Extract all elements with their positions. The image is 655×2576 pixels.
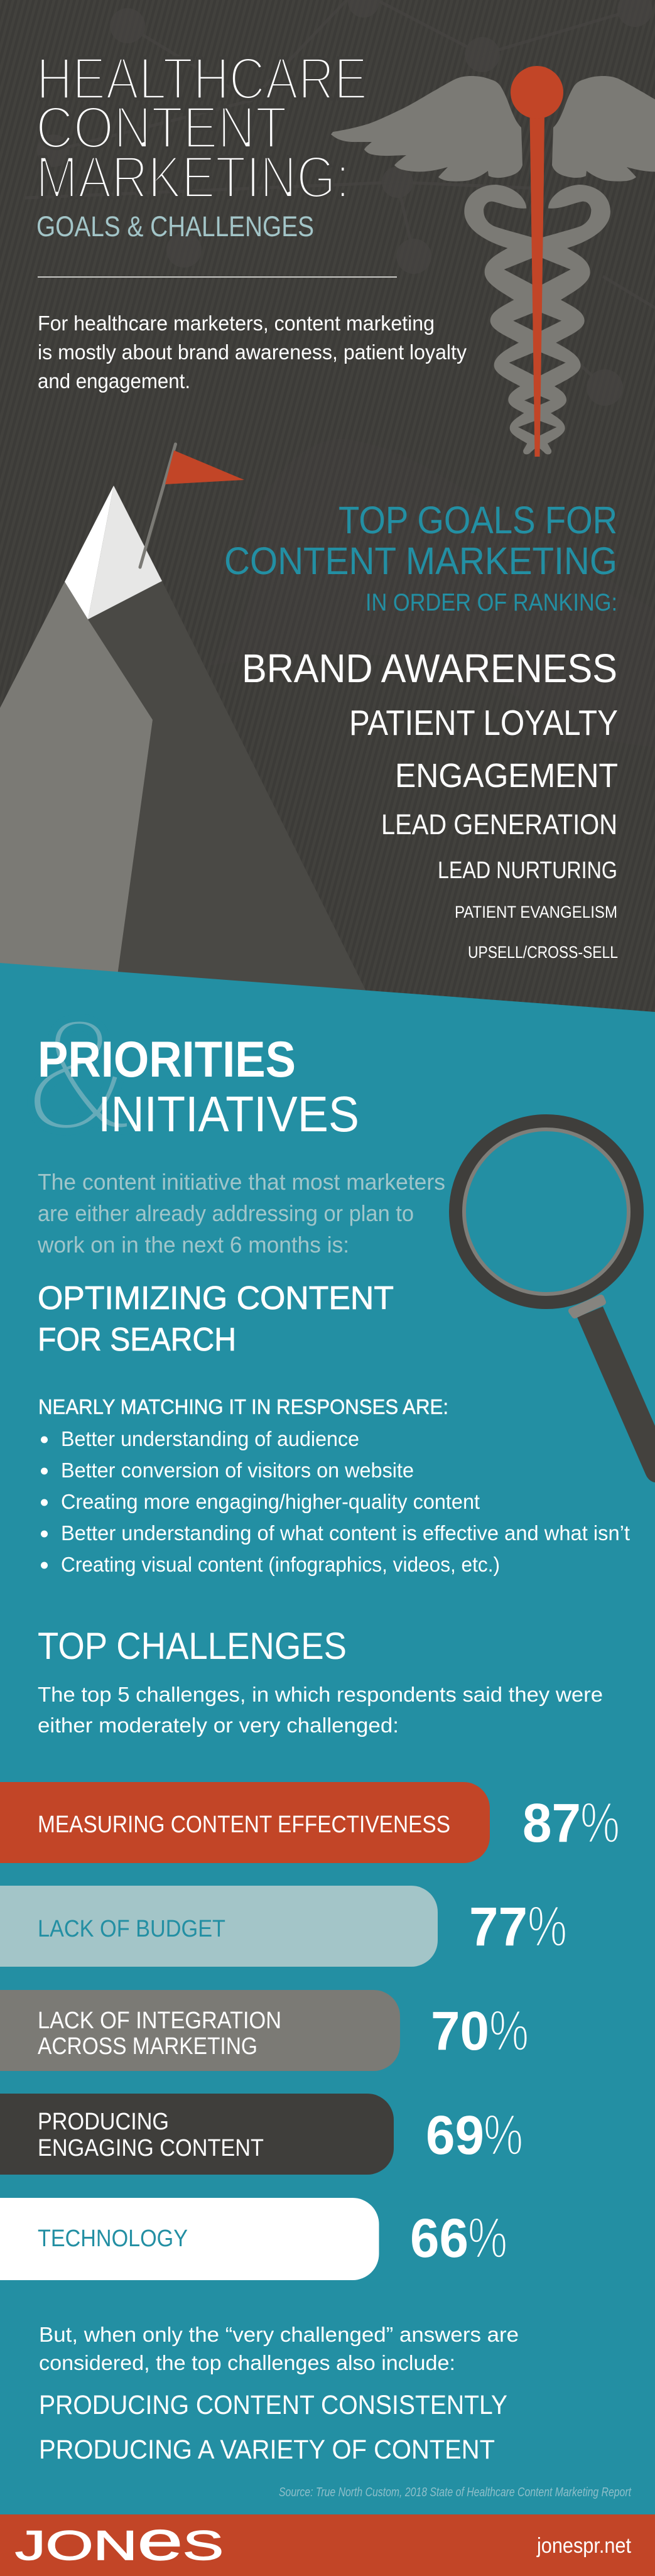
closing text: considered, the top challenges also include: — [39, 2351, 455, 2374]
snakes — [464, 185, 610, 454]
bar: technology 66% — [0, 2198, 507, 2280]
goals ranked list: UPSELL/CROSS-SELL — [468, 943, 618, 962]
goals ranked list: LEAD GENERATION — [381, 808, 617, 840]
subtitle: GOALS & CHALLENGES — [36, 210, 314, 242]
intro text: content initiative: are either already addressing or plan to — [38, 1200, 414, 1226]
list heading: NEARLY MATCHING IT IN RESPONSES ARE: — [38, 1395, 448, 1418]
goals ranked list — [242, 646, 618, 962]
bar: technology 66%: TECHNOLOGY — [38, 2225, 188, 2252]
bullet list — [41, 1427, 630, 1576]
icon: magnifying glass — [457, 1122, 655, 1482]
intro text: and engagement. — [38, 369, 190, 393]
decorative ampersand: & — [25, 983, 133, 1165]
staff — [530, 113, 544, 457]
goals ranked list: BRAND AWARENESS — [242, 646, 617, 691]
bar: lack of integration 70%: ACROSS MARKETING — [38, 2033, 257, 2060]
intro text — [38, 312, 467, 393]
bullet list: Creating visual content (infographics, videos, etc.) — [61, 1553, 500, 1576]
bar: measuring content effectiveness 87%: % — [580, 1791, 620, 1855]
bar: producing engaging content 69%: PRODUCING — [38, 2109, 169, 2135]
bar: measuring content effectiveness 87%: 87 — [522, 1793, 581, 1854]
bar: measuring content effectiveness 87% — [0, 1782, 620, 1863]
lens ring — [457, 1122, 636, 1302]
bar: lack of integration 70% — [0, 1990, 529, 2071]
goals ranked list: ENGAGEMENT — [395, 757, 618, 795]
callout: optimizing content for search: FOR SEARCH — [38, 1322, 236, 1358]
intro text: is mostly about brand awareness, patient loyalty — [38, 340, 467, 364]
collar — [571, 1298, 603, 1315]
closing text — [39, 2323, 519, 2374]
bar: producing engaging content 69%: % — [484, 2104, 523, 2167]
panel: dark striped header background — [0, 0, 655, 1018]
bar: producing engaging content 69%: ENGAGING CONTENT — [38, 2135, 264, 2161]
logo: Jones: JON e S — [15, 2509, 224, 2572]
intro text: content initiative — [37, 1169, 445, 1258]
title: HEALTHCARE — [36, 45, 367, 112]
flag pole — [140, 444, 176, 567]
challenges intro text — [38, 1683, 603, 1737]
bar: lack of integration 70%: 70 — [431, 2001, 489, 2062]
panel: teal section background — [0, 963, 655, 2576]
lens inner ring — [464, 1129, 629, 1294]
snow cap bright — [65, 486, 114, 619]
snow cap shaded — [88, 486, 162, 619]
bar: lack of budget 77% — [0, 1886, 567, 1967]
callout: additional challenges — [39, 2390, 507, 2465]
bullet list: Better understanding of audience — [61, 1427, 359, 1450]
icon: mountain with flag — [0, 444, 370, 999]
bar: lack of integration 70%: % — [489, 1999, 529, 2063]
bar: lack of budget 77%: % — [528, 1895, 567, 1959]
title — [36, 45, 367, 211]
intro text: content initiative: work on in the next 6 months is: — [37, 1232, 349, 1258]
goals ranked list: PATIENT EVANGELISM — [455, 903, 617, 921]
flag — [165, 450, 244, 484]
goals ranked list: LEAD NURTURING — [438, 857, 617, 884]
challenges intro text: The top 5 challenges, in which respondents said they were — [38, 1683, 603, 1706]
bullet list: Creating more engaging/higher-quality content — [61, 1490, 480, 1513]
bar: measuring content effectiveness 87%: MEASURING CONTENT EFFECTIVENESS — [38, 1812, 450, 1838]
callout: optimizing content for search — [38, 1280, 394, 1358]
challenges intro text: either moderately or very challenged: — [38, 1714, 399, 1737]
bar: lack of budget 77%: LACK OF BUDGET — [38, 1916, 225, 1942]
bullet list: Better understanding of what content is effective and what isn’t — [61, 1521, 630, 1545]
website: jonespr.net — [536, 2534, 631, 2558]
handle — [577, 1307, 655, 1482]
heading: top goals: TOP GOALS FOR — [338, 499, 617, 541]
divider line — [38, 276, 397, 278]
bullet list: Better conversion of visitors on website — [61, 1459, 414, 1482]
footer band — [0, 2509, 655, 2576]
intro text: For healthcare marketers, content marketing — [38, 312, 435, 335]
callout: additional challenges: PRODUCING CONTENT CONSISTENTLY — [39, 2390, 507, 2420]
mountain light face — [0, 582, 153, 980]
staff head — [511, 66, 563, 119]
heading: top challenges: TOP CHALLENGES — [38, 1625, 347, 1667]
title: CONTENT — [36, 94, 287, 161]
intro text: content initiative: The content initiative that most marketers — [38, 1169, 445, 1195]
heading: priorities and initiatives: INITIATIVES — [98, 1086, 359, 1142]
goals ranked list: PATIENT LOYALTY — [349, 703, 618, 743]
bar: lack of budget 77%: 77 — [469, 1896, 528, 1957]
bar: producing engaging content 69% — [0, 2094, 523, 2175]
bar: technology 66%: % — [468, 2207, 507, 2270]
heading: priorities and initiatives — [38, 1031, 359, 1142]
mountain dark face — [88, 486, 370, 999]
callout: additional challenges: PRODUCING A VARIETY OF CONTENT — [39, 2435, 495, 2465]
heading: top goals: IN ORDER OF RANKING: — [365, 589, 617, 616]
bar: technology 66%: 66 — [410, 2208, 468, 2269]
right wing — [552, 76, 655, 182]
background network pattern — [25, 0, 655, 747]
closing text: But, when only the “very challenged” answers are — [39, 2323, 519, 2346]
heading: priorities and initiatives: PRIORITIES — [38, 1031, 296, 1088]
heading: top goals — [224, 499, 617, 616]
bar: producing engaging content 69%: 69 — [426, 2105, 484, 2166]
callout: optimizing content for search: OPTIMIZING CONTENT — [38, 1280, 394, 1317]
bar: lack of integration 70%: LACK OF INTEGRATION — [38, 2008, 281, 2034]
icon: caduceus — [331, 66, 655, 457]
left wing — [331, 76, 522, 182]
title: MARKETING: — [36, 144, 350, 211]
heading: top goals: CONTENT MARKETING — [224, 540, 617, 582]
